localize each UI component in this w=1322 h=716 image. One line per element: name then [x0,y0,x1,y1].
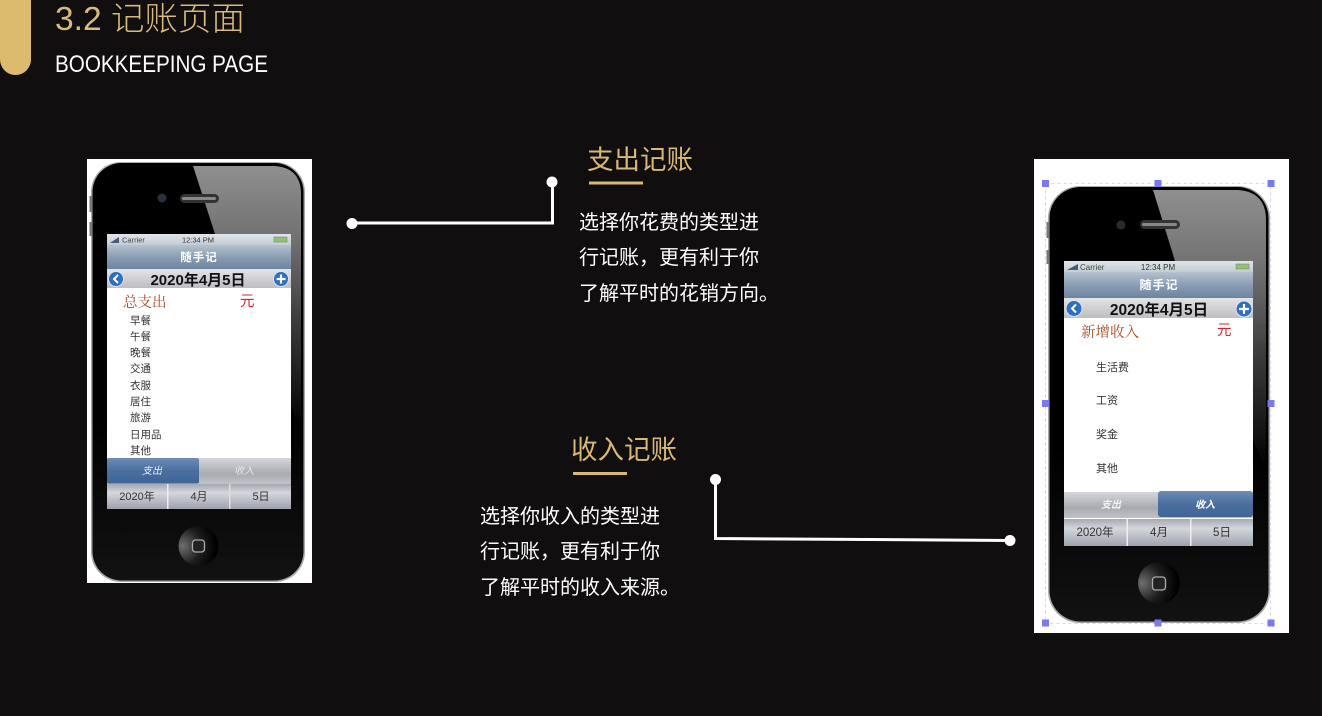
screen: 早餐 [130,314,151,327]
text: expense description [579,211,779,305]
screen: 生活费 [1096,360,1129,374]
screen [107,234,291,509]
title: 3.2 记账页面 [55,0,245,37]
screen: Carrier [122,236,145,244]
subtitle: BOOKKEEPING PAGE [55,51,268,78]
screen: 新增收入 [1081,324,1139,341]
screen: 5日 [1213,527,1231,539]
screen: 日用品 [130,429,162,441]
text: income description: 行记账，更有利于你 [480,540,660,563]
screen: 衣服 [130,379,151,392]
screen: 元 [240,294,254,310]
screen: 5日 [252,491,270,503]
text: expense description: 选择你花费的类型进 [579,211,759,234]
screen: 元 [1217,323,1232,339]
screen: 随手记 [180,250,218,264]
screen: 其他 [130,444,151,457]
screen: 12:34 PM [1141,263,1175,272]
screen: 12:34 PM [182,236,214,244]
text: expense description: 了解平时的花销方向。 [579,282,779,305]
underline: expense [589,182,643,184]
text: expense description: 行记账，更有利于你 [579,246,759,269]
screen: 居住 [130,395,151,408]
screen: 旅游 [130,411,151,424]
screen: 2020年4月5日 [1110,300,1208,319]
text: income description [480,505,680,599]
screen: 工资 [1096,394,1118,407]
selection handles [1042,180,1274,626]
screen: 2020年 [1076,525,1114,539]
screen [1064,261,1253,546]
screen: 支出 [142,465,163,477]
text: income description: 了解平时的收入来源。 [480,576,680,599]
home button [1138,562,1180,604]
screen: 2020年 [119,489,155,503]
screen: 收入 [234,465,254,477]
connector: expense [346,176,558,229]
screen: 晚餐 [130,346,151,359]
screen: 总支出 [123,294,166,311]
underline: income [573,472,627,475]
screen: 4月 [1150,527,1168,539]
text: income description: 选择你收入的类型进 [480,505,660,528]
screen: 支出 [1101,499,1122,511]
home button [178,526,218,566]
screen: 交通 [130,362,151,375]
phone: expense screen [87,159,312,583]
screen: 4月 [190,491,208,503]
heading: income: 收入记账 [571,435,677,465]
phone: income screen [1034,159,1289,633]
title pill accent [0,0,31,75]
screen: 午餐 [130,330,151,343]
screen: 收入 [1195,499,1215,511]
screen: 随手记 [1139,277,1179,292]
screen: Carrier [1080,263,1105,272]
screen: 2020年4月5日 [150,271,246,289]
heading: expense: 支出记账 [587,145,693,175]
screen: 其他 [1096,462,1118,475]
screen: 奖金 [1096,427,1118,441]
connector: income [710,474,1016,546]
